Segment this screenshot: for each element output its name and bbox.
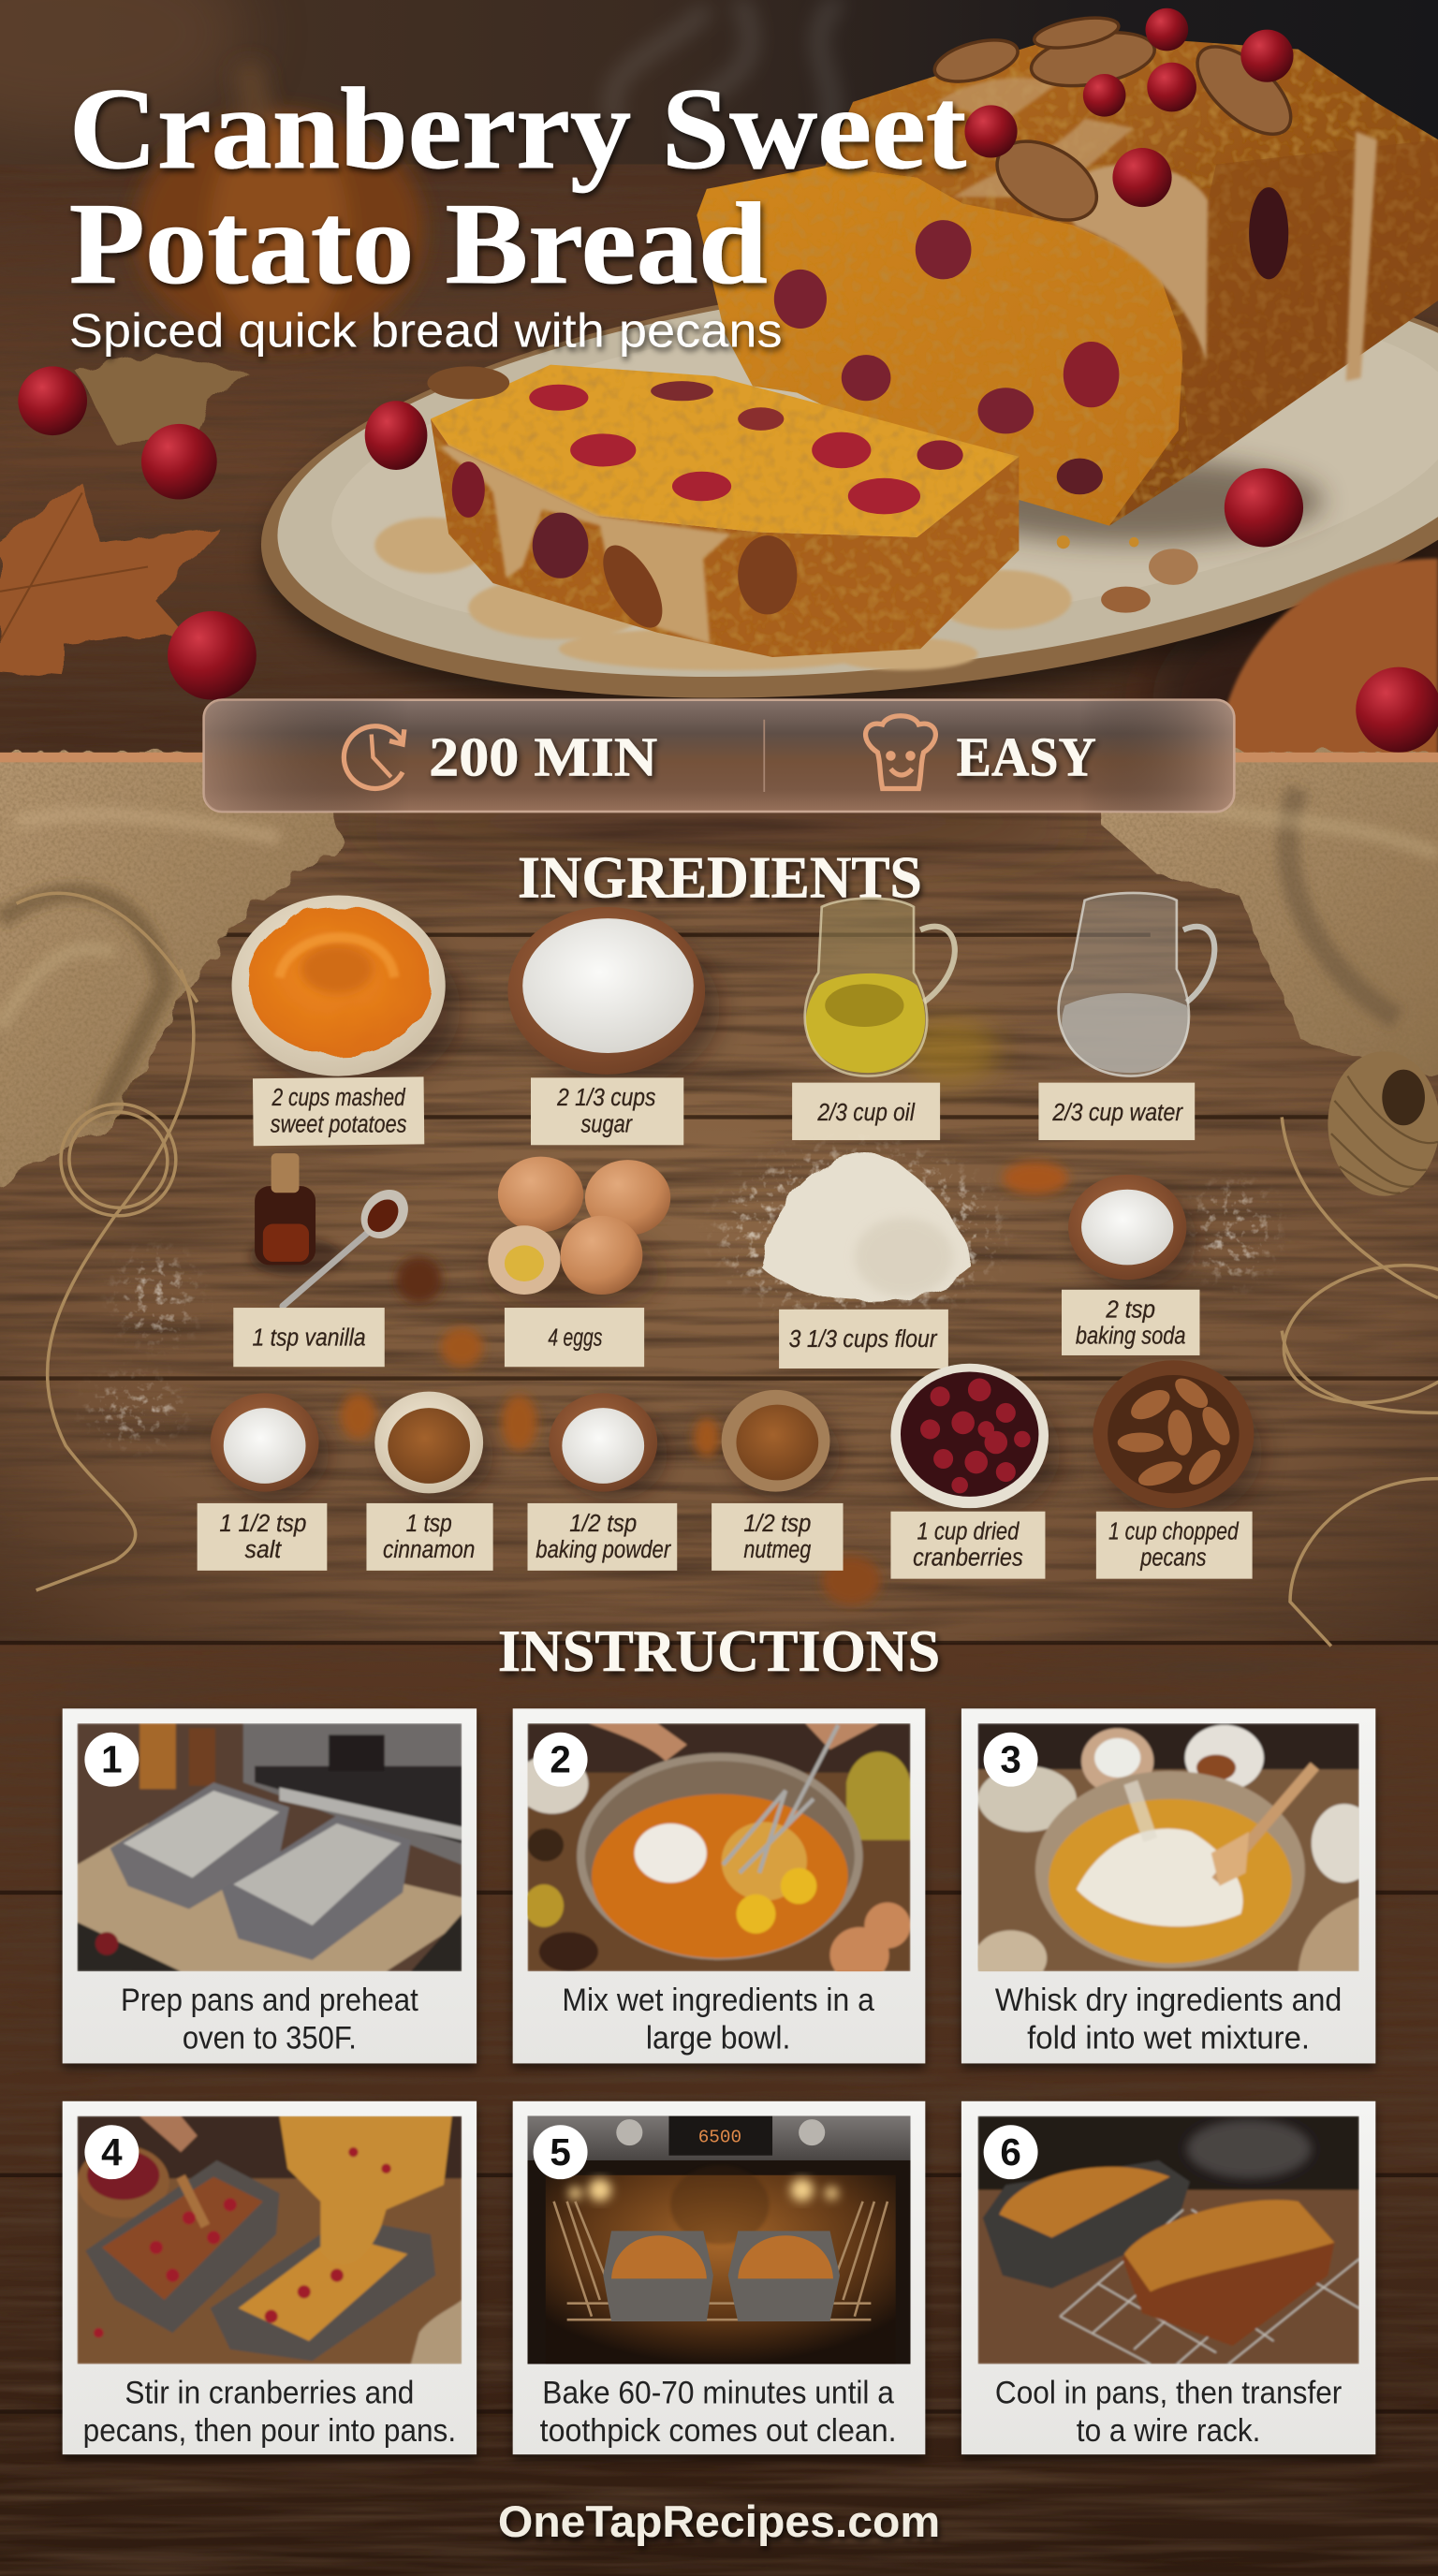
label: 2 cups mashed	[271, 1083, 406, 1111]
label: 2 tsp	[1105, 1295, 1155, 1324]
step text: Prep pans and preheat	[121, 1983, 418, 2018]
big loaf	[697, 8, 1438, 544]
step text	[540, 2376, 897, 2449]
photo: baking in oven	[527, 2116, 911, 2364]
step text: fold into wet mixture.	[1027, 2021, 1310, 2056]
step number	[84, 1733, 139, 1787]
ingredient: oil pitcher	[805, 899, 999, 1084]
step number: 2	[550, 1738, 571, 1781]
ingredient: eggs	[488, 1157, 670, 1310]
title: Potato Bread	[69, 179, 768, 308]
label: nutmeg	[743, 1535, 812, 1563]
glaze on loaf	[937, 78, 1377, 381]
panel: hero photo of the bread	[0, 0, 1438, 753]
step text: toothpick comes out clean.	[540, 2413, 897, 2449]
photo: baking in oven: 6500	[698, 2128, 741, 2148]
ingredient: salt	[211, 1393, 329, 1500]
step number: 6	[1000, 2130, 1021, 2174]
text: difficulty: EASY	[957, 725, 1096, 787]
step text: oven to 350F.	[183, 2021, 357, 2056]
label: 2/3 cup water	[1051, 1098, 1183, 1126]
step 2 card	[513, 1708, 925, 2063]
label: baking powder	[536, 1535, 671, 1563]
orange cloth and cranberry	[1216, 559, 1438, 759]
label	[890, 1512, 1045, 1579]
step text: Bake 60-70 minutes until a	[542, 2376, 895, 2411]
text: time: 200 MIN	[429, 725, 657, 787]
ingredient: dried cranberries	[890, 1364, 1060, 1518]
subtitle: Spiced quick bread with pecans	[69, 303, 783, 357]
label: 1 cup chopped	[1108, 1517, 1240, 1545]
ingredient: baking powder	[549, 1393, 668, 1500]
label	[1038, 1083, 1195, 1140]
label: 1 tsp	[406, 1509, 452, 1537]
step text: to a wire rack.	[1077, 2413, 1260, 2449]
label	[1062, 1290, 1199, 1355]
label: 1 tsp vanilla	[252, 1323, 366, 1351]
label: 1 1/2 tsp	[219, 1509, 306, 1537]
step 4 card	[63, 2101, 477, 2454]
step number: 3	[1000, 1738, 1021, 1781]
step 6 card	[961, 2101, 1375, 2454]
step number	[984, 1733, 1038, 1787]
plate	[253, 305, 1438, 698]
twine left	[17, 893, 198, 1590]
label	[792, 1083, 940, 1140]
ingredient: chopped pecans	[1093, 1360, 1262, 1518]
label	[531, 1077, 683, 1145]
burlap cloth right	[1098, 753, 1438, 1083]
label	[505, 1308, 644, 1367]
label: baking soda	[1076, 1322, 1186, 1350]
step number	[84, 2125, 139, 2179]
ingredient: mashed sweet potatoes	[232, 896, 461, 1090]
label: 2 1/3 cups	[556, 1083, 655, 1111]
spice dustings	[92, 1162, 1272, 1605]
ingredient: water pitcher	[1059, 893, 1214, 1076]
step number	[534, 2125, 588, 2179]
step 1 card	[63, 1708, 477, 2063]
step text: large bowl.	[646, 2021, 790, 2056]
step number: 5	[550, 2130, 571, 2174]
step text	[995, 1983, 1342, 2056]
step number: 1	[101, 1738, 123, 1781]
photo: prepared pans	[78, 1723, 462, 1971]
label: 2/3 cup oil	[816, 1098, 916, 1126]
step text	[562, 1983, 875, 2056]
step 3 card	[961, 1708, 1377, 2063]
ingredient: vanilla bottle and spoon	[250, 1153, 418, 1306]
panel: instructions wood background	[0, 1643, 1438, 2576]
label	[198, 1503, 327, 1571]
ingredient: cinnamon	[374, 1392, 493, 1500]
label: sweet potatoes	[271, 1109, 406, 1137]
label: 4 eggs	[548, 1323, 602, 1351]
ingredient: sugar	[507, 907, 720, 1084]
pumpkin in background	[135, 60, 424, 348]
step number	[984, 2125, 1038, 2179]
ingredient: flour pile	[720, 1150, 996, 1314]
step text: Whisk dry ingredients and	[995, 1983, 1342, 2018]
label: salt	[245, 1535, 283, 1563]
label: 1/2 tsp	[569, 1509, 637, 1537]
label	[253, 1076, 424, 1146]
photo: cooling on wire rack	[977, 2116, 1359, 2374]
label	[779, 1310, 948, 1368]
ingredient: baking soda bowl	[1068, 1175, 1196, 1288]
step text	[83, 2376, 456, 2449]
photo: stirring in cranberries and pecans	[78, 2116, 462, 2364]
icon: smiling chef hat	[866, 716, 935, 788]
footer: website: OneTapRecipes.com	[498, 2497, 940, 2547]
step text: Stir in cranberries and	[125, 2376, 414, 2411]
steam	[611, 0, 838, 148]
label: 3 1/3 cups flour	[789, 1325, 938, 1353]
step number	[534, 1733, 588, 1787]
label: 1 cup dried	[917, 1517, 1020, 1545]
loaf crust and side	[825, 33, 1438, 526]
title	[69, 64, 966, 308]
step text: Cool in pans, then transfer	[995, 2376, 1342, 2411]
label	[233, 1308, 385, 1367]
loaf cut face	[697, 166, 1183, 526]
cranberries on loaf	[964, 105, 1018, 157]
slice of bread	[431, 365, 1019, 657]
loaf-divider stripe	[0, 753, 1438, 762]
title: Cranberry Sweet	[69, 64, 966, 193]
twine right with spool	[1269, 1051, 1438, 1647]
heading: ingredients: INGREDIENTS	[518, 844, 922, 910]
loose cranberries	[18, 366, 1303, 700]
ingredient: nutmeg	[722, 1390, 840, 1500]
leaves on table	[0, 354, 249, 676]
label	[366, 1503, 493, 1571]
label: sugar	[581, 1109, 633, 1137]
step text	[121, 1983, 418, 2056]
badge: time and difficulty	[204, 700, 1234, 812]
photo: mixing wet ingredients	[516, 1723, 911, 1983]
step text: Mix wet ingredients in a	[562, 1983, 875, 2018]
step text: pecans, then pour into pans.	[83, 2413, 456, 2449]
syrup pools	[374, 518, 1072, 670]
step text	[995, 2376, 1342, 2449]
label: 1/2 tsp	[743, 1509, 811, 1537]
icon: clock	[344, 726, 404, 788]
photo: adding dry ingredients	[975, 1723, 1377, 1986]
pecans on loaf	[932, 16, 1292, 222]
crumbs and pecan bits	[427, 366, 1198, 613]
step 5 card	[513, 2101, 925, 2454]
label: pecans	[1139, 1544, 1206, 1572]
burlap cloth left	[0, 753, 344, 1190]
label: cranberries	[913, 1544, 1023, 1572]
label	[712, 1503, 844, 1571]
heading: instructions: INSTRUCTIONS	[498, 1618, 940, 1684]
label: cinnamon	[383, 1535, 475, 1563]
label	[1096, 1512, 1253, 1579]
step number: 4	[101, 2130, 123, 2174]
panel: ingredients wood background	[0, 759, 1438, 1647]
label	[527, 1503, 677, 1571]
